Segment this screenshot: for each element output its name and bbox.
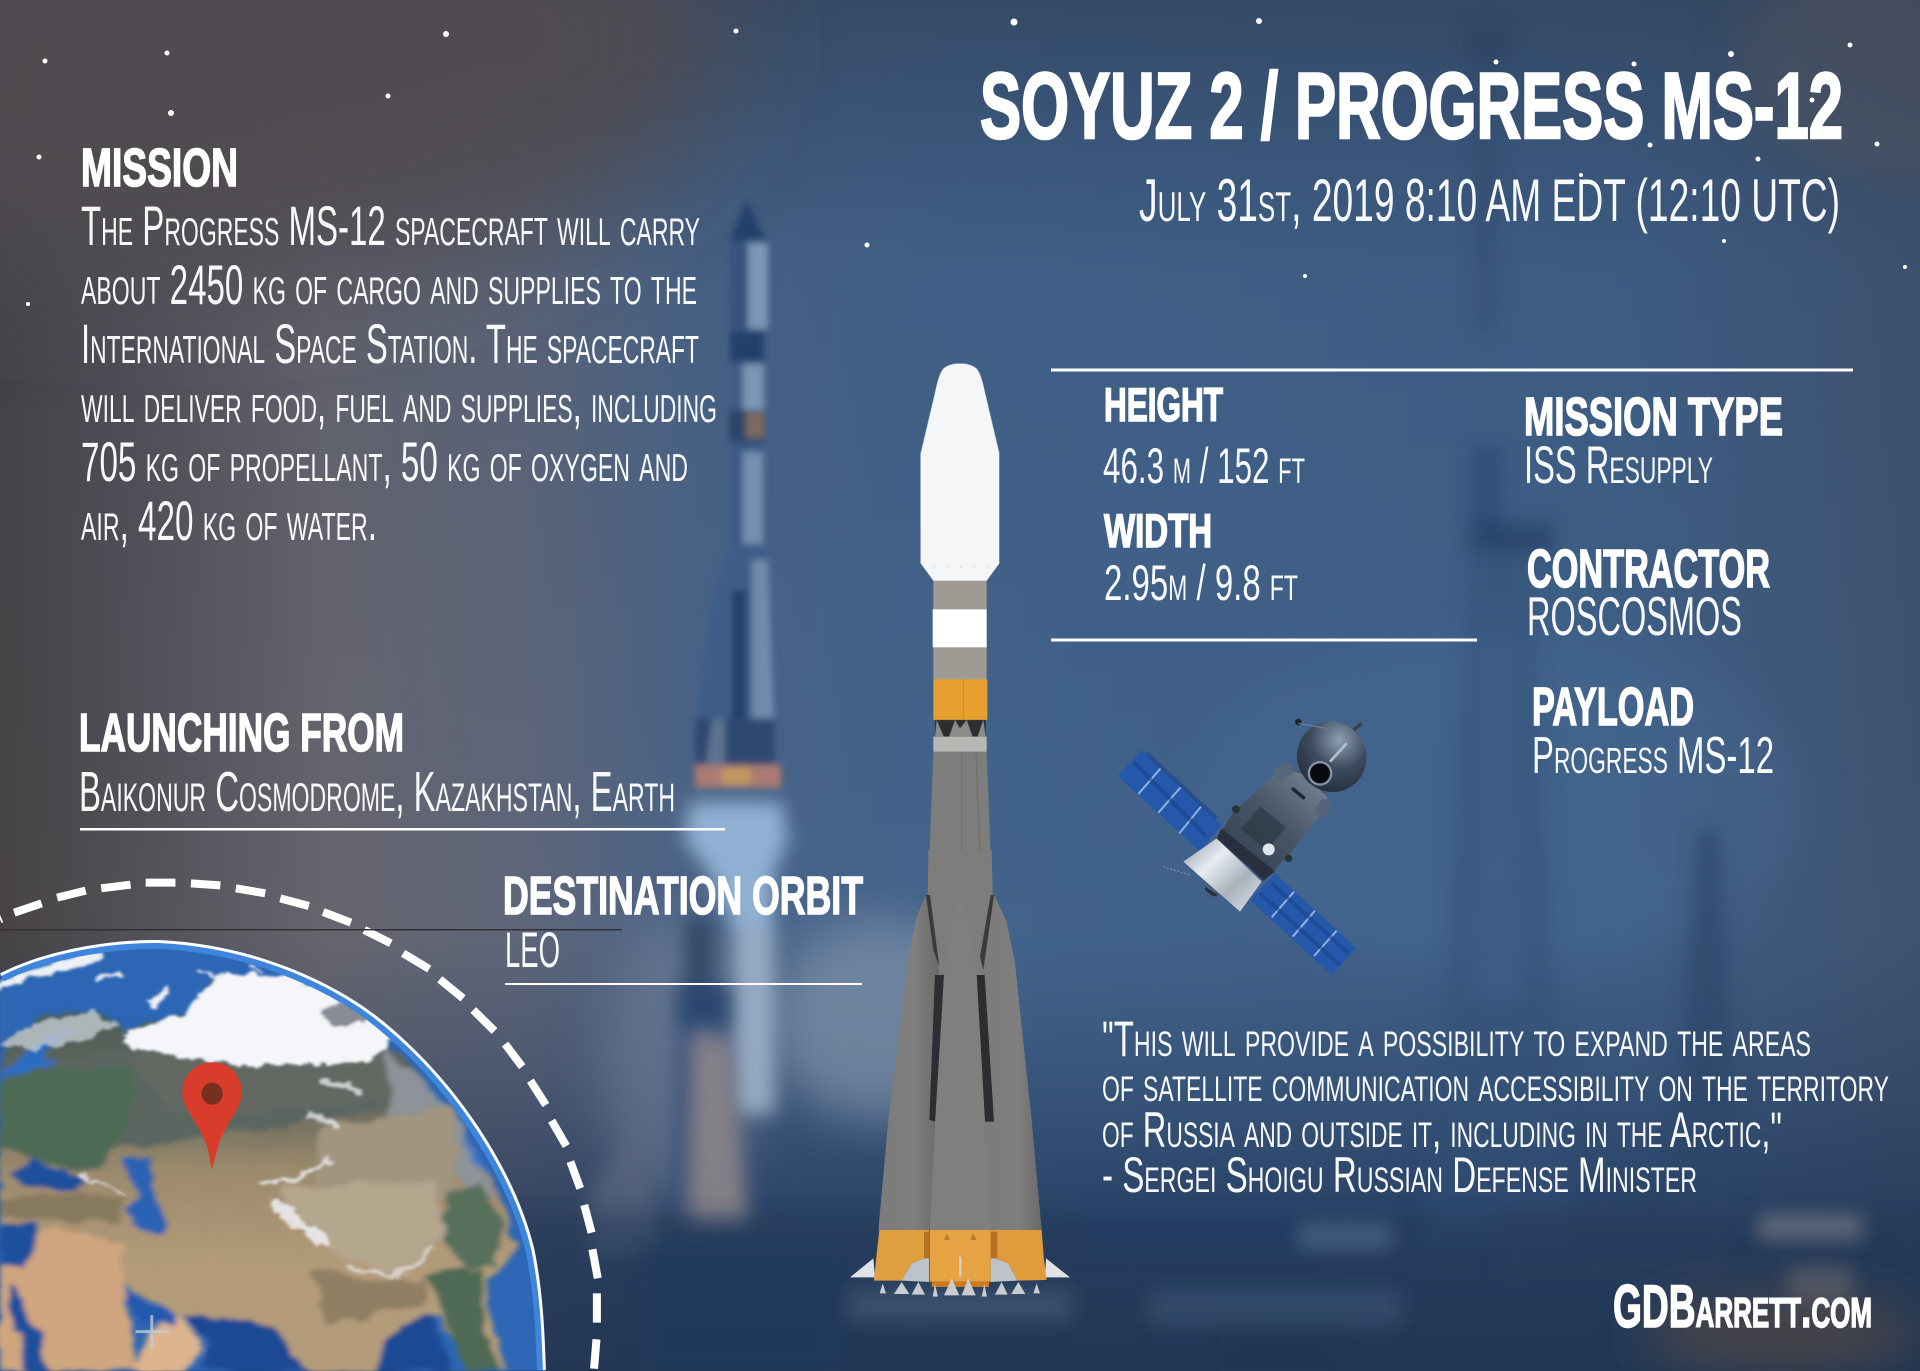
- contractor block: CONTRACTOR: [1527, 539, 1770, 599]
- background rocket: [695, 200, 781, 788]
- thin divider over globe: [0, 929, 622, 930]
- payload block: [1532, 677, 1774, 785]
- mission heading: MISSION: [81, 138, 238, 198]
- upper stage and fairing: [921, 363, 999, 853]
- background ground and buildings: [526, 1204, 1870, 1330]
- spacecraft: Progress MS-12: [1118, 709, 1379, 975]
- launch site block: Baikonur Cosmodrome, Kazakhstan, Earth: [79, 760, 675, 824]
- rocket height and width stats: 2.95m / 9.8 ft: [1104, 555, 1298, 611]
- mission type block: ISS Resupply: [1524, 436, 1713, 495]
- dashed orbit line: [0, 883, 598, 1369]
- rocket: Soyuz 2: [850, 363, 1070, 1297]
- rocket height and width stats: HEIGHT: [1104, 378, 1223, 431]
- mission description: air, 420 kg of water.: [81, 489, 377, 552]
- contractor block: ROSCOSMOS: [1527, 585, 1742, 647]
- rocket height and width stats: 46.3 m / 152 ft: [1103, 438, 1305, 494]
- launch site block: LAUNCHING FROM: [79, 703, 404, 763]
- payload block: Progress MS-12: [1532, 727, 1774, 785]
- icon: cross marker: [135, 1315, 169, 1348]
- mission description: [81, 194, 717, 552]
- icon: location pin: [182, 1062, 242, 1169]
- mission description: 705 kg of propellant, 50 kg of oxygen and: [81, 430, 688, 493]
- mission type block: [1524, 387, 1783, 495]
- contractor block: [1527, 539, 1770, 647]
- stars: [26, 18, 1907, 306]
- strap-on boosters: [850, 850, 1070, 1297]
- launch site block: [79, 703, 725, 830]
- background flame and exhaust plume: [684, 802, 788, 1115]
- mission description: International Space Station. The spacecraft: [81, 312, 699, 375]
- earth globe: [0, 930, 567, 1371]
- destination orbit block: [503, 866, 863, 985]
- quote from Sergei Shoigu: [1102, 1011, 1889, 1203]
- rocket height and width stats: WIDTH: [1104, 504, 1212, 557]
- destination orbit block: LEO: [505, 922, 560, 978]
- background launch gantry: [590, 917, 750, 1260]
- payload block: PAYLOAD: [1532, 677, 1694, 737]
- destination orbit block: DESTINATION ORBIT: [503, 866, 863, 926]
- mission description: will deliver food, fuel and supplies, including: [81, 371, 717, 434]
- mission type block: MISSION TYPE: [1524, 387, 1783, 447]
- mission description: The Progress MS-12 spacecraft will carry: [81, 194, 700, 257]
- mission description: about 2450 kg of cargo and supplies to the: [81, 253, 697, 316]
- background towers: [1452, 30, 1728, 1096]
- rocket height and width stats: [1051, 368, 1853, 642]
